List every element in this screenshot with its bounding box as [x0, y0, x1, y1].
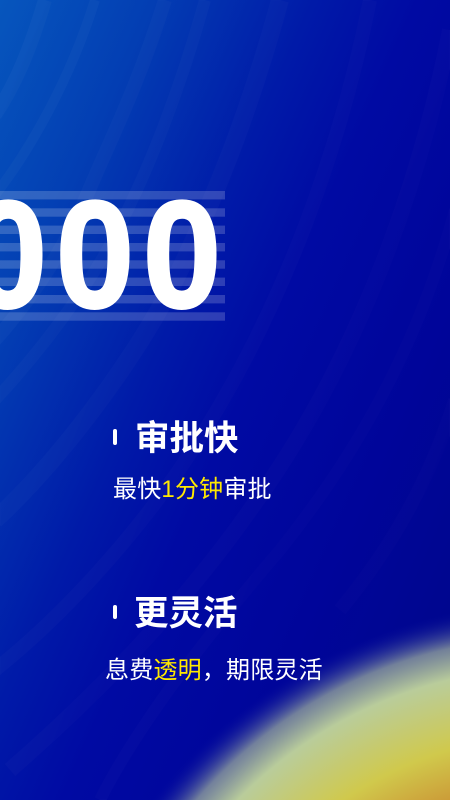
description: 最快1分钟审批 [113, 476, 272, 503]
tick mark [113, 605, 117, 619]
description: 息费透明，期限灵活 [105, 657, 323, 684]
feature: fast approval [113, 420, 272, 503]
large number: 0 [143, 170, 221, 340]
striped band behind number [0, 191, 225, 321]
large number: 0 [56, 170, 134, 340]
tick mark [113, 429, 117, 445]
heading: 更灵活 [134, 595, 238, 633]
large number [0, 170, 221, 340]
feature: more flexible [105, 595, 323, 684]
heading: 审批快 [135, 420, 238, 458]
